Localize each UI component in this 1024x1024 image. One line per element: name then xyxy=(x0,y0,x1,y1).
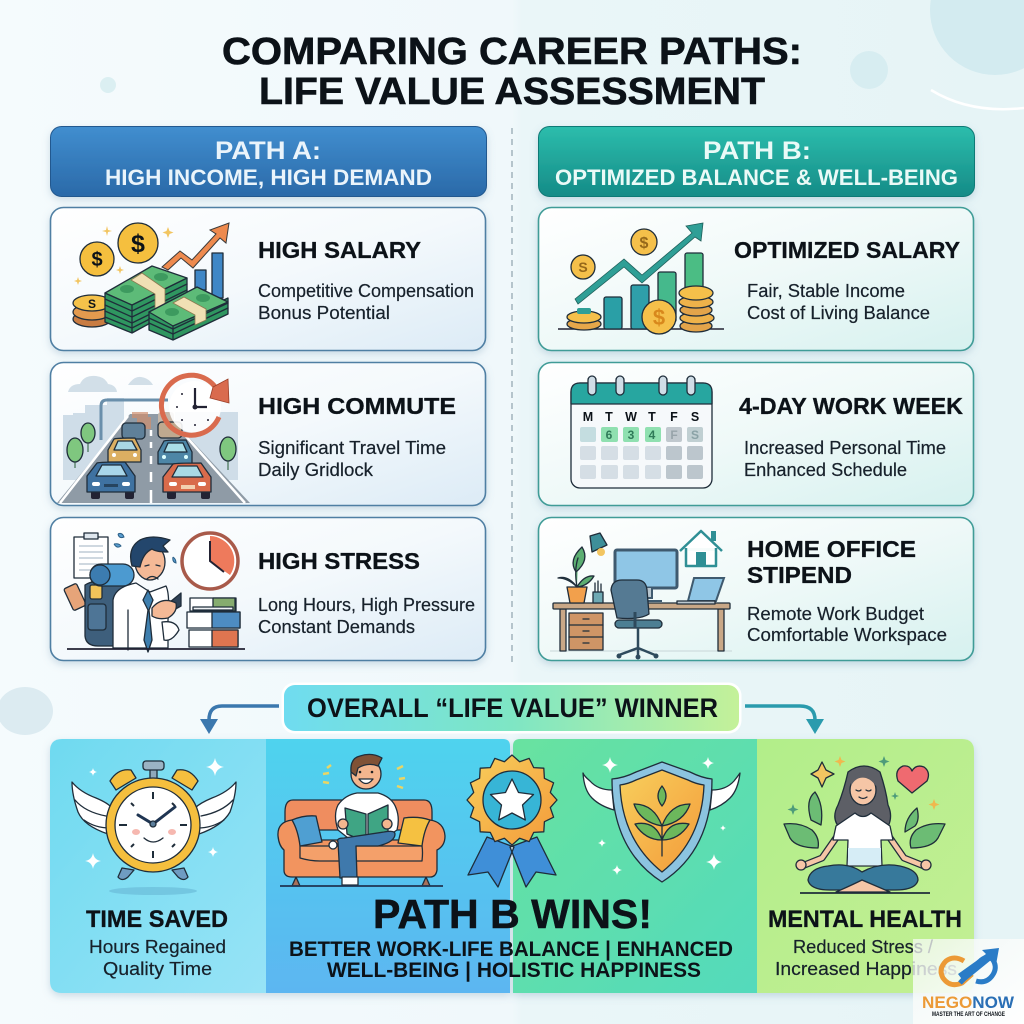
icon: logo loop xyxy=(941,948,999,985)
section: path b wins: PATH B WINS! xyxy=(373,891,652,937)
panel header: Path A: HIGH INCOME, HIGH DEMAND xyxy=(105,165,432,190)
banner: overall winner: OVERALL “LIFE VALUE” WINNER xyxy=(307,693,718,723)
icon: money and growth: $ xyxy=(91,249,103,271)
logo: NegoNow xyxy=(913,939,1024,1024)
card: home office stipend: Comfortable Workspace xyxy=(747,625,947,645)
icon: calendar: S xyxy=(691,428,699,442)
card: home office stipend: HOME OFFICE xyxy=(747,536,916,562)
card: high salary: Competitive Compensation xyxy=(258,281,474,301)
icon: calendar: W xyxy=(625,410,637,424)
car: mid left xyxy=(108,438,141,462)
section: mental health xyxy=(768,756,962,979)
icon: calendar: F xyxy=(670,410,678,424)
card: home office stipend: Remote Work Budget xyxy=(747,604,924,624)
card: high commute xyxy=(50,362,486,506)
panel header: Path B xyxy=(538,126,974,196)
card: high stress: Constant Demands xyxy=(258,617,415,637)
column divider xyxy=(511,128,513,665)
icon: balanced growth chart: S xyxy=(578,259,588,275)
section: time saved: Quality Time xyxy=(103,959,212,979)
section: mental health: Reduced Stress / xyxy=(793,937,933,957)
title xyxy=(222,31,802,113)
icon: calendar xyxy=(571,376,712,488)
banner: overall winner xyxy=(282,682,742,734)
icon: calendar: T xyxy=(648,410,656,424)
card: 4-day work week: Increased Personal Time xyxy=(744,438,946,458)
icon: money and growth: S xyxy=(88,297,96,311)
card: high salary xyxy=(50,208,486,350)
card: optimized salary: OPTIMIZED SALARY xyxy=(734,237,960,263)
card: 4-day work week: 4-DAY WORK WEEK xyxy=(739,393,963,419)
panel header: Path A xyxy=(50,126,486,196)
icon: winged alarm clock xyxy=(72,758,236,895)
card: 4-day work week xyxy=(538,362,974,506)
section: time saved: Hours Regained xyxy=(89,937,226,957)
icon: winged shield xyxy=(583,757,740,882)
icon: meditating woman xyxy=(784,756,945,893)
card: high commute: Daily Gridlock xyxy=(258,460,374,480)
card: high commute: Significant Travel Time xyxy=(258,438,446,458)
car: front left xyxy=(87,462,135,499)
car: front right xyxy=(163,463,211,499)
section: path b wins: WELL-BEING | HOLISTIC HAPPINESS xyxy=(327,959,701,982)
panel header: Path B: PATH B: xyxy=(703,137,811,165)
arrow: to mental health xyxy=(745,706,824,734)
logo: NegoNow: NEGONOW xyxy=(922,993,1015,1012)
icon: stressed commuter xyxy=(64,533,245,652)
card: home office stipend: STIPEND xyxy=(747,562,852,588)
section: path b wins: BETTER WORK-LIFE BALANCE | ENHANCED xyxy=(289,938,733,961)
card: high commute: HIGH COMMUTE xyxy=(258,393,456,419)
icon: calendar: M xyxy=(583,410,593,424)
section: path b wins xyxy=(278,754,740,982)
winner panel xyxy=(50,739,974,993)
icon: money and growth: $ xyxy=(131,230,145,258)
arrow: to time saved xyxy=(200,706,279,734)
icon: balanced growth chart: $ xyxy=(653,305,665,330)
section: time saved xyxy=(72,758,236,979)
card: optimized salary xyxy=(538,208,974,350)
icon: calendar: F xyxy=(670,428,678,442)
card: high stress: HIGH STRESS xyxy=(258,548,420,574)
icon: traffic and clock xyxy=(57,375,250,503)
icon: award rosette xyxy=(467,755,557,887)
icon: calendar: 3 xyxy=(628,428,635,442)
panel header: Path B: OPTIMIZED BALANCE & WELL-BEING xyxy=(555,165,958,190)
card: home office stipend xyxy=(538,518,974,660)
icon: calendar: S xyxy=(691,410,699,424)
card: high salary: HIGH SALARY xyxy=(258,237,421,263)
icon: home office desk xyxy=(550,531,732,660)
card: 4-day work week: Enhanced Schedule xyxy=(744,460,907,480)
title: COMPARING CAREER PATHS: xyxy=(222,31,802,73)
card: high salary: Bonus Potential xyxy=(258,303,390,323)
icon: calendar: T xyxy=(605,410,613,424)
section: mental health: MENTAL HEALTH xyxy=(768,906,962,933)
car: mid right xyxy=(158,440,192,464)
icon: calendar: 4 xyxy=(649,428,656,442)
section: mental health: Increased Happiness xyxy=(775,959,957,979)
icon: person reading on sofa xyxy=(278,754,445,886)
logo: NegoNow: MASTER THE ART OF CHANGE xyxy=(932,1012,1005,1018)
card: optimized salary: Cost of Living Balance xyxy=(747,303,930,323)
card: high stress: Long Hours, High Pressure xyxy=(258,595,475,615)
icon: money and growth xyxy=(73,223,229,340)
icon: balanced growth chart: $ xyxy=(640,235,649,252)
icon: calendar: 6 xyxy=(606,428,613,442)
card: optimized salary: Fair, Stable Income xyxy=(747,281,905,301)
card: high stress xyxy=(50,518,486,660)
panel header: Path A: PATH A: xyxy=(215,137,321,165)
section: time saved: TIME SAVED xyxy=(86,906,228,933)
icon: balanced growth chart xyxy=(558,223,724,334)
title: LIFE VALUE ASSESSMENT xyxy=(259,71,765,113)
